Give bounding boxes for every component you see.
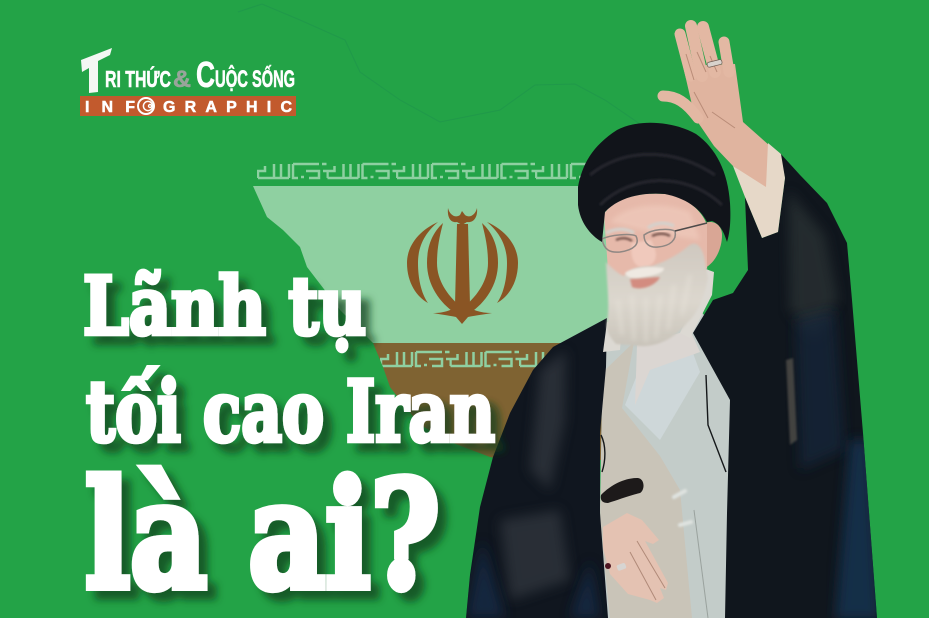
logo: Tri Thức & Cuộc Sống Infographic bbox=[80, 48, 296, 116]
mustache bbox=[625, 267, 664, 278]
flag pattern: top band bbox=[257, 162, 592, 180]
portrait of the Supreme Leader bbox=[460, 26, 880, 618]
creases bbox=[686, 52, 735, 128]
lips bbox=[630, 277, 660, 288]
title line 2: tối cao Iran bbox=[86, 362, 495, 461]
forehead shading bbox=[610, 205, 700, 240]
beard bbox=[606, 244, 708, 346]
map outline of Iran bbox=[238, 4, 640, 124]
title bbox=[83, 259, 495, 618]
emblem of Iran bbox=[407, 208, 518, 324]
hand rings bbox=[605, 563, 611, 569]
collar mesh bbox=[603, 268, 714, 352]
inner shirt bbox=[625, 345, 700, 440]
logo wordmark bbox=[105, 54, 295, 95]
logo: Tri Thức & Cuộc Sống Infographic: GRAPHIC bbox=[163, 99, 292, 116]
eyes bbox=[616, 234, 670, 241]
lapel beige bbox=[600, 342, 692, 618]
resting hand bbox=[603, 513, 668, 603]
prayer cord bbox=[601, 375, 726, 472]
sleeve cuff bbox=[733, 143, 785, 238]
title line 3: là ai? bbox=[85, 448, 440, 618]
robe right and sleeve bbox=[690, 150, 880, 618]
palm and forearm bbox=[683, 64, 770, 190]
logo wordmark: C bbox=[196, 54, 215, 95]
buttons bbox=[674, 491, 691, 525]
beard texture bbox=[618, 275, 690, 342]
eyebrows bbox=[606, 223, 674, 233]
ear bbox=[703, 222, 722, 268]
title line 1: Lãnh tụ bbox=[83, 259, 366, 353]
turban bbox=[578, 123, 730, 242]
logo infographic bar bbox=[80, 96, 296, 116]
logo mark T bbox=[81, 48, 112, 93]
logo wordmark: RI THỨC bbox=[105, 65, 171, 92]
logo wordmark: SỐNG bbox=[252, 65, 295, 93]
turban folds bbox=[590, 154, 722, 205]
logo wordmark: UỘC bbox=[215, 65, 248, 93]
logo wordmark: & bbox=[173, 66, 191, 93]
garment seam bbox=[694, 510, 708, 618]
face bbox=[604, 194, 707, 300]
ring on raised hand bbox=[707, 59, 722, 68]
nose bbox=[631, 240, 656, 267]
logo O icon bbox=[138, 98, 154, 114]
fingers bbox=[663, 26, 729, 118]
robe left bbox=[466, 318, 608, 618]
logo: Tri Thức & Cuộc Sống Infographic: INF bbox=[85, 99, 135, 116]
glasses bbox=[602, 223, 707, 252]
raised arm and hand bbox=[663, 26, 770, 190]
cane handle bbox=[601, 478, 644, 503]
inner garment grey bbox=[600, 310, 732, 618]
flag map body bbox=[250, 186, 650, 463]
